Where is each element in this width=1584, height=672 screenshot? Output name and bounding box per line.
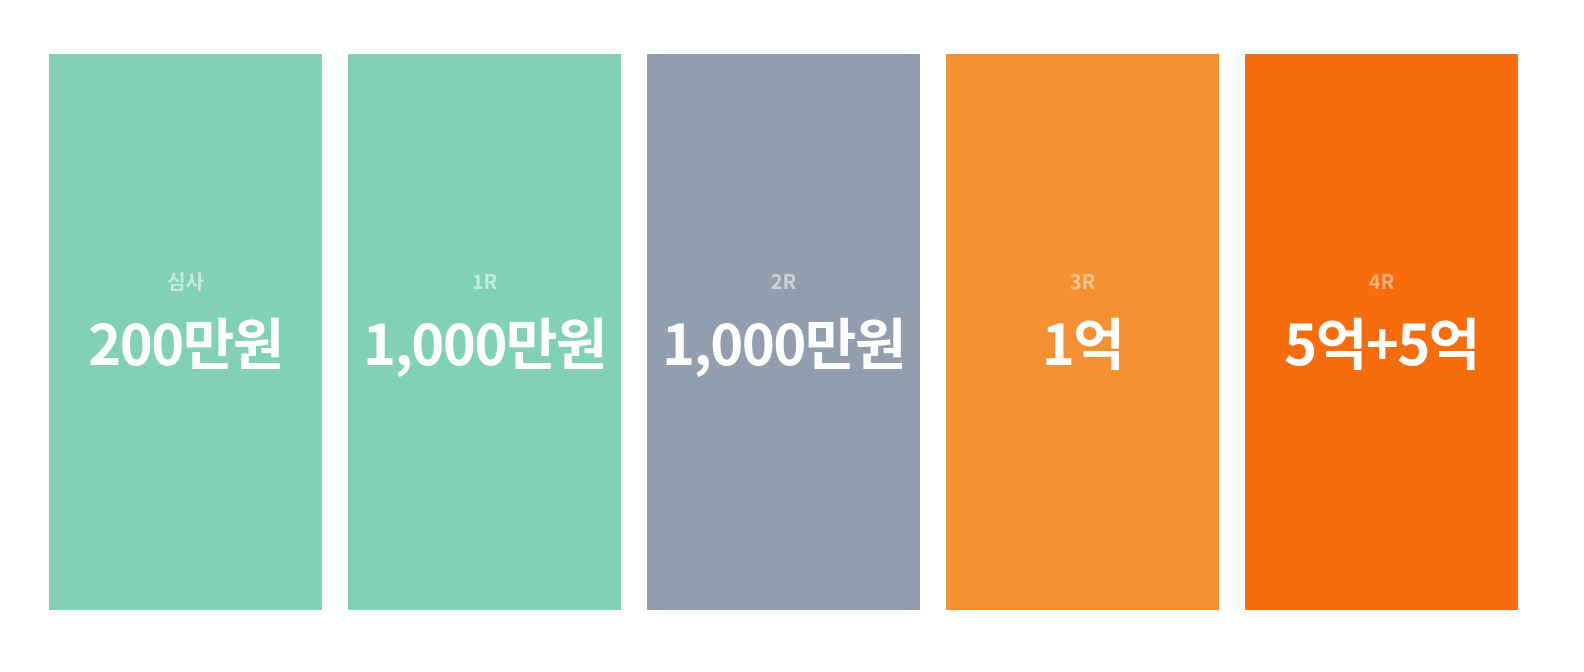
panel: 1R xyxy=(348,54,621,610)
value: 1,000만원: 1,000만원 xyxy=(662,301,905,382)
value: 1억: 1억 xyxy=(1042,301,1123,382)
label: 4R: 4R xyxy=(1369,266,1394,295)
label: 1R: 1R xyxy=(472,266,497,295)
panel: 4R xyxy=(1245,54,1518,610)
panel: 심사 xyxy=(49,54,322,610)
panel: 2R xyxy=(647,54,920,610)
panel: 3R xyxy=(946,54,1219,610)
value: 200만원: 200만원 xyxy=(88,301,283,382)
value: 5억+5억: 5억+5억 xyxy=(1284,301,1479,382)
label: 3R: 3R xyxy=(1070,266,1095,295)
label: 심사: 심사 xyxy=(167,266,204,295)
label: 2R: 2R xyxy=(771,266,796,295)
value: 1,000만원: 1,000만원 xyxy=(363,301,606,382)
